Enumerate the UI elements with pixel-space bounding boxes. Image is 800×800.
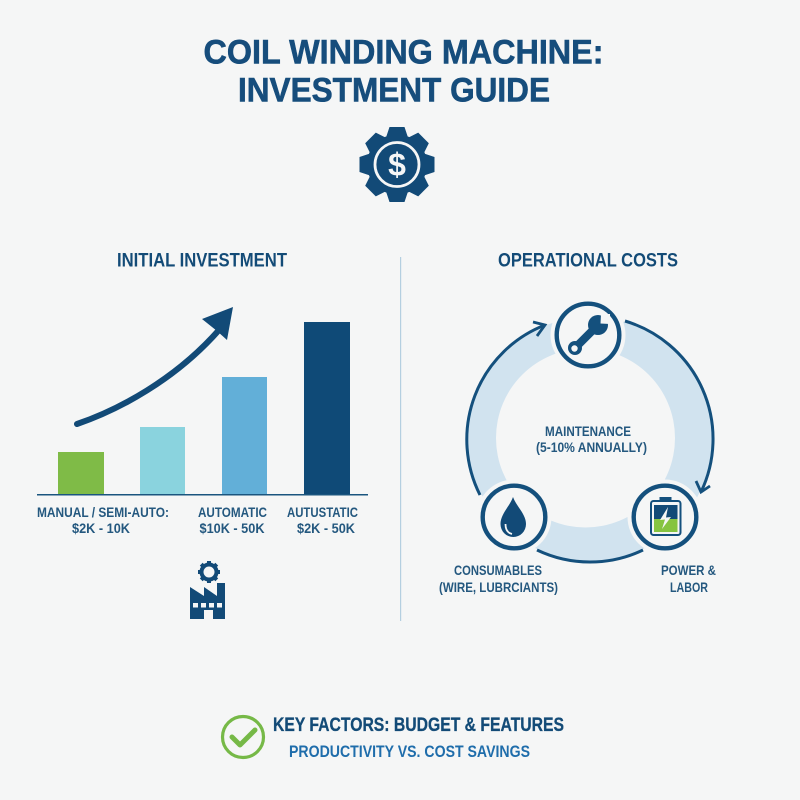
icon: factory with gear (190, 561, 225, 619)
title: COIL WINDING MACHINE: (204, 34, 604, 72)
icon: battery (628, 480, 702, 554)
bar labels: MANUAL / SEMI-AUTO: (37, 505, 169, 520)
text: key factors: KEY FACTORS: BUDGET & FEATURES (273, 714, 564, 736)
bar labels: AUTUSTATIC (287, 505, 358, 520)
center label: maintenance: (5-10% ANNUALLY) (536, 440, 647, 455)
label: power and labor (661, 563, 716, 595)
center label: maintenance (536, 424, 647, 455)
arrow: rising trend (77, 307, 233, 424)
text: productivity vs cost savings: PRODUCTIVITY VS. COST SAVINGS (289, 742, 530, 761)
bar chart (37, 322, 368, 496)
title: INVESTMENT GUIDE (238, 72, 550, 110)
bar labels: $2K - 10K (72, 521, 130, 536)
heading: initial investment: INITIAL INVESTMENT (117, 250, 287, 272)
heading: operational costs: OPERATIONAL COSTS (498, 250, 678, 272)
panel: initial investment (37, 250, 368, 619)
label: power and labor: LABOR (670, 580, 708, 595)
bar labels: AUTOMATIC (198, 505, 267, 520)
icon: wrench (550, 298, 626, 372)
label: consumables: (WIRE, LUBRCIANTS) (439, 580, 558, 595)
panel: operational costs (439, 250, 716, 595)
cycle ring (467, 317, 713, 562)
icon: gear with dollar sign: $ (388, 146, 406, 182)
icon: gear with dollar sign (360, 127, 434, 202)
title (204, 34, 604, 110)
label: power and labor: POWER & (661, 563, 716, 578)
label: consumables (439, 563, 558, 595)
bar labels (37, 505, 358, 536)
center label: maintenance: MAINTENANCE (545, 424, 631, 439)
icon: oil drop (476, 480, 552, 554)
icon: green check (222, 716, 264, 758)
label: consumables: CONSUMABLES (454, 563, 542, 578)
bar labels: $10K - 50K (200, 521, 265, 536)
footer: key factors (222, 714, 564, 761)
bar labels: $2K - 50K (297, 521, 355, 536)
